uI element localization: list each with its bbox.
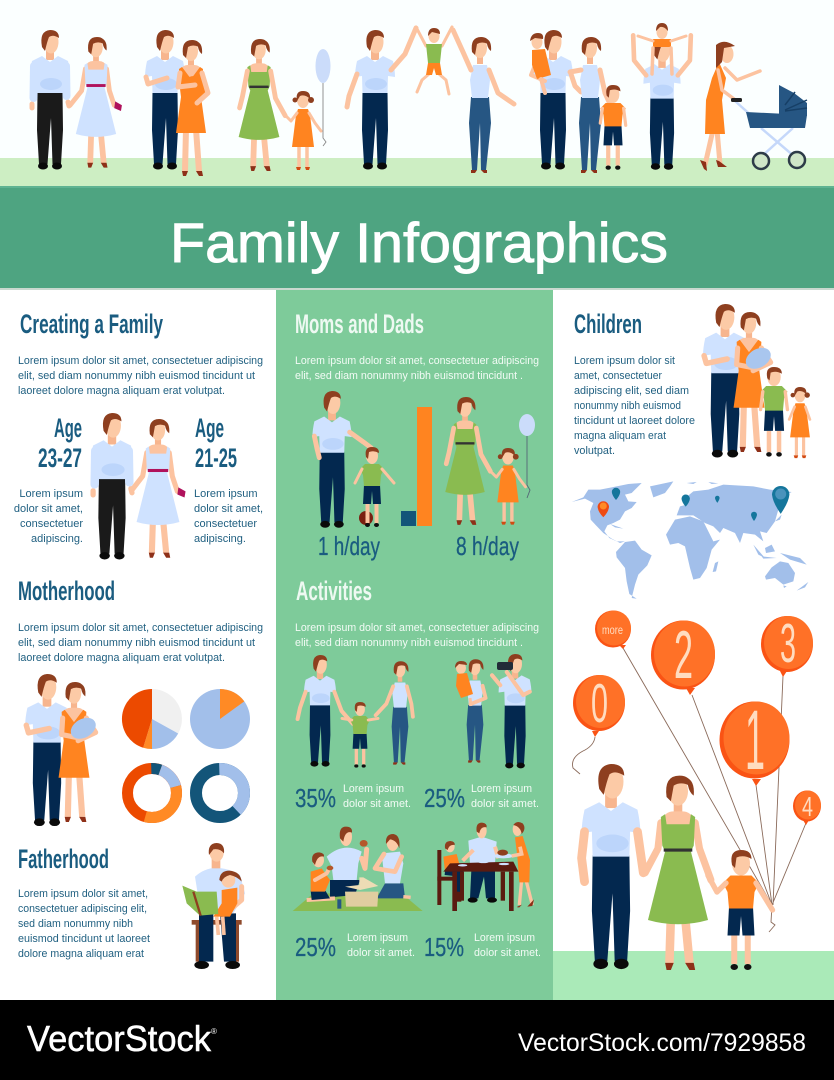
- heading: Activities: Activities: [296, 576, 372, 606]
- panel: left column: [0, 290, 276, 1000]
- text: 15% note: dolor sit amet.: [474, 947, 541, 959]
- figure: picnic: [293, 827, 423, 911]
- figure: father with girl on shoulders: [633, 23, 691, 170]
- balloon: 3: 3: [780, 612, 796, 674]
- text: children body: Lorem ipsum dolor sit: [574, 355, 675, 367]
- pie chart 2: [190, 689, 250, 749]
- text: 35% note: dolor sit amet.: [343, 798, 411, 810]
- text: 25% photo note: dolor sit amet.: [471, 798, 539, 810]
- figure: family of four: [530, 30, 626, 173]
- figure: family holding balloons: [582, 764, 772, 970]
- panel: middle column: [276, 290, 553, 1000]
- figure: family dinner: [437, 822, 534, 911]
- stat: 35%: 35%: [295, 783, 336, 813]
- text: groom note: consectetuer: [20, 518, 83, 530]
- figure: father reading to daughter: [182, 843, 245, 969]
- text: 15% note: [474, 932, 541, 959]
- map pins: [598, 486, 789, 521]
- bar chart: hours per day: [401, 407, 432, 526]
- balloon: 1: [720, 693, 790, 787]
- text: fatherhood body: [18, 888, 150, 960]
- text: children body: magna aliquam erat: [574, 430, 666, 442]
- text: groom note: Lorem ipsum: [19, 488, 83, 500]
- text: creating a family body: [18, 355, 263, 397]
- text: groom note: adipiscing.: [31, 533, 83, 545]
- text: activities body: Lorem ipsum dolor sit amet, consectetuer adipiscing: [295, 622, 539, 634]
- figure: family photo: [455, 654, 531, 768]
- balloon: more: more: [602, 623, 623, 637]
- balloon: 2: [651, 617, 715, 695]
- balloon: 0: 0: [591, 672, 608, 734]
- figure: mom and daughter with balloon: [445, 397, 535, 525]
- pie chart 1: [122, 689, 182, 749]
- heading: Children: Children: [574, 309, 642, 339]
- stat: groom age: Age: [54, 413, 82, 443]
- footer: watermark bar: ®: [211, 1027, 217, 1036]
- text: 25% picnic note: [347, 932, 415, 959]
- text: groom note: dolor sit amet,: [14, 503, 83, 515]
- text: motherhood body: Lorem ipsum dolor sit amet, consectetuer adipiscing: [18, 622, 263, 634]
- balloon strings: [572, 648, 806, 932]
- text: bride note: adipiscing.: [194, 533, 246, 545]
- text: 35% note: [343, 783, 411, 810]
- figure: family with children: [703, 304, 810, 458]
- text: 35% note: Lorem ipsum: [343, 783, 404, 795]
- text: creating a family body: Lorem ipsum dolor sit amet, consectetuer adipiscing: [18, 355, 263, 367]
- title banner: [0, 186, 834, 290]
- panel: top hero scene: [0, 0, 834, 186]
- footer: watermark bar: [0, 1000, 834, 1080]
- stat: 25% picnic: 25%: [295, 932, 336, 962]
- figure: family walking: [298, 655, 413, 768]
- figure: parents lifting child: [347, 27, 514, 173]
- text: children body: tincidunt ut laoreet dolore: [574, 415, 695, 427]
- stat: 15%: 15%: [424, 932, 464, 962]
- balloon: 2: 2: [674, 617, 693, 693]
- text: moms and dads body: elit, sed diam nonummy nibh euismod tincidunt .: [295, 370, 523, 382]
- text: moms and dads body: Lorem ipsum dolor sit amet, consectetuer adipiscing: [295, 355, 539, 367]
- text: fatherhood body: sed diam nonummy nibh: [18, 918, 133, 930]
- text: creating a family body: laoreet dolore magna aliquam erat volutpat.: [18, 385, 225, 397]
- figure: expecting couple: [145, 30, 208, 176]
- footer: watermark bar: VectorStock.com/7929858: [518, 1029, 806, 1057]
- heading: Creating a Family: Creating a Family: [20, 309, 163, 339]
- figure: couple: [91, 413, 186, 559]
- balloon: 3: [761, 612, 813, 677]
- text: children body: amet, consectetuer: [574, 370, 662, 382]
- stat: bride age: Age: [195, 413, 224, 443]
- text: activities body: elit, sed diam nonummy nibh euismod tincidunt .: [295, 637, 523, 649]
- stat: bride age: [195, 413, 237, 473]
- text: fatherhood body: dolore magna aliquam erat: [18, 948, 144, 960]
- text: bride note: Lorem ipsum: [194, 488, 258, 500]
- text: 25% photo note: [471, 783, 539, 810]
- stat: mom hours: 8 h/day: [456, 531, 519, 561]
- figure: dad and son with ball: [312, 391, 394, 528]
- figure: parents with newborn: [25, 674, 100, 826]
- balloon: 4: [793, 790, 821, 825]
- panel: right column: [553, 290, 834, 1000]
- donut chart 2: [196, 769, 244, 817]
- text: motherhood body: [18, 622, 263, 664]
- text: children body: nonummy nibh euismod: [574, 400, 681, 412]
- footer: watermark bar: VectorStock: [27, 1018, 212, 1059]
- text: moms and dads body: [295, 355, 539, 382]
- figure: bride and groom: [30, 30, 122, 170]
- heading: Fatherhood: Fatherhood: [18, 844, 109, 874]
- stat: dad hours: 1 h/day: [318, 531, 380, 561]
- figure: mother pushing pram: [700, 42, 807, 171]
- text: children body: volutpat.: [574, 445, 615, 457]
- title banner: Family Infographics: [170, 211, 668, 274]
- text: 25% photo note: Lorem ipsum: [471, 783, 532, 795]
- stat: groom age: [38, 413, 82, 473]
- stat: bride age: 21-25: [195, 443, 237, 473]
- heading: Moms and Dads: Moms and Dads: [295, 309, 424, 339]
- balloon: more: [595, 610, 631, 649]
- balloon: 4: 4: [802, 791, 813, 822]
- text: 15% note: Lorem ipsum: [474, 932, 535, 944]
- text: activities body: [295, 622, 539, 649]
- figure: mother and daughter with balloon: [239, 39, 330, 171]
- stat: 25% photo: 25%: [424, 783, 465, 813]
- heading: Motherhood: Motherhood: [18, 576, 115, 606]
- donut chart 1: [128, 768, 176, 818]
- text: creating a family body: elit, sed diam nonummy nibh euismod tincidunt ut: [18, 370, 255, 382]
- text: children body: [574, 355, 695, 457]
- text: motherhood body: elit, sed diam nonummy nibh euismod tincidunt ut: [18, 637, 255, 649]
- balloon: 0: [573, 672, 625, 737]
- text: 25% picnic note: Lorem ipsum: [347, 932, 408, 944]
- text: children body: adipiscing elit, sed diam: [574, 385, 689, 397]
- stat: groom age: 23-27: [38, 443, 82, 473]
- text: 25% picnic note: dolor sit amet.: [347, 947, 415, 959]
- text: groom note: [14, 488, 83, 545]
- text: fatherhood body: euismod tincidunt ut laoreet: [18, 933, 150, 945]
- text: motherhood body: laoreet dolore magna aliquam erat volutpat.: [18, 652, 225, 664]
- text: bride note: [194, 488, 263, 545]
- world map: [572, 481, 808, 599]
- text: fatherhood body: Lorem ipsum dolor sit amet,: [18, 888, 148, 900]
- balloon: 1: 1: [745, 693, 765, 787]
- text: bride note: dolor sit amet,: [194, 503, 263, 515]
- text: fatherhood body: consectetuer adipiscing elit,: [18, 903, 147, 915]
- text: bride note: consectetuer: [194, 518, 257, 530]
